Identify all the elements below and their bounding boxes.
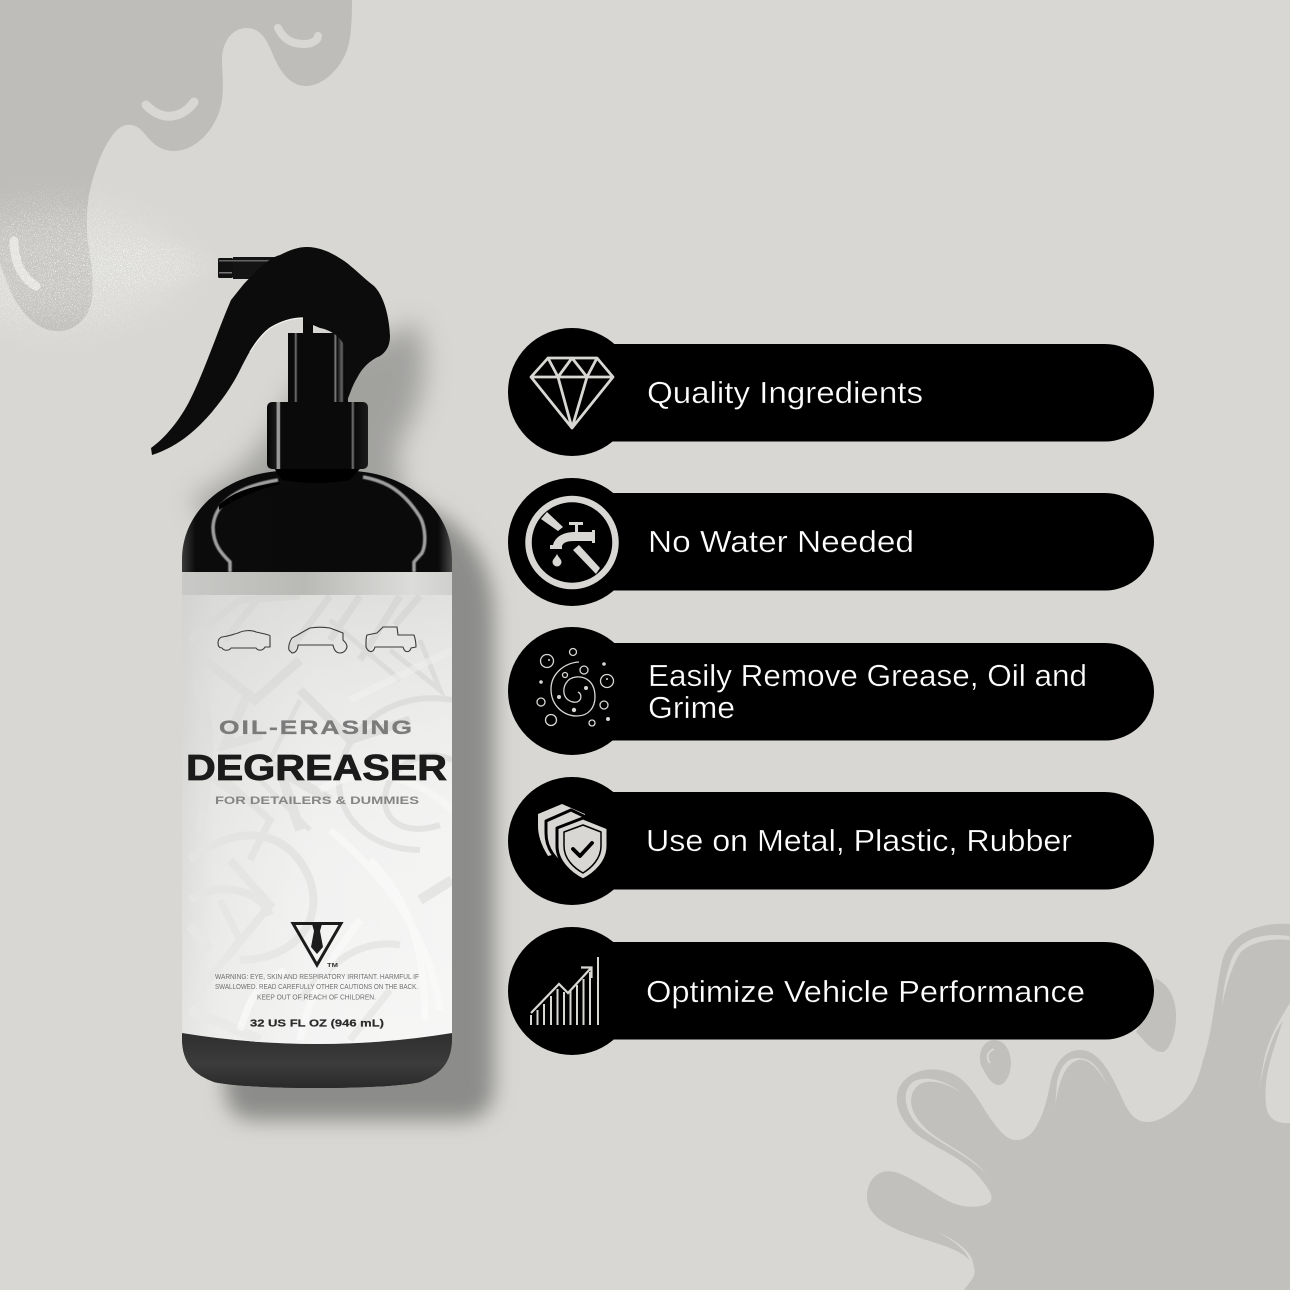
warning text [215,972,420,1002]
benefit 4: use on metal, plastic, rubber: Use on Metal, Plastic, Rubber [646,823,1072,858]
icon: layered shields [538,804,608,880]
spray mist [0,175,225,355]
label text: FOR DETAILERS & DUMMIES [215,795,419,807]
benefit 2: no water needed [508,478,1154,606]
top-left liquid drip [0,0,352,331]
warning text: KEEP OUT OF REACH OF CHILDREN. [257,992,376,1002]
bottom-right liquid splash [867,924,1290,1290]
benefit 1: quality ingredients: Quality Ingredients [647,375,923,410]
volume text: 32 US FL OZ (946 mL) [250,1018,384,1030]
pump neck [288,316,348,405]
bottle body [182,469,452,1088]
car outlines [218,627,416,653]
trigger underside highlight [250,318,303,352]
icon: diamond [531,358,613,428]
icon: crossed tap [528,499,616,586]
brand logo [293,924,341,969]
benefit 5: optimize vehicle performance: Optimize Vehicle Performance [646,974,1085,1009]
label text [186,717,447,807]
benefit 3: easily remove grease: Easily Remove Grease, Oil and [648,658,1087,693]
base [182,1028,452,1088]
brand logo: TM [327,963,338,969]
icon: swirl and bubbles [537,648,614,726]
benefit 4: use on metal, plastic, rubber [508,777,1154,905]
benefit 3: easily remove grease [508,627,1154,755]
cap [267,402,368,469]
trigger nozzle [218,257,283,279]
icon: rising chart [531,957,598,1025]
shoulder dark sweep [219,482,280,510]
benefit 3: easily remove grease: Grime [648,690,735,725]
benefit 5: optimize vehicle performance [508,927,1154,1055]
benefit 2: no water needed: No Water Needed [648,524,914,559]
label text: DEGREASER [186,747,447,788]
label pattern [250,595,452,1042]
label text: OIL-ERASING [219,717,414,739]
trigger head [151,247,390,455]
shoulder highlights [213,477,425,572]
label [182,572,452,1052]
benefit 1: quality ingredients [508,328,1154,456]
warning text: SWALLOWED. READ CAREFULLY OTHER CAUTIONS ON THE BACK. [215,982,418,991]
spray bottle [151,247,452,1088]
collar [270,462,366,483]
product shadow [190,320,494,1120]
warning text: WARNING: EYE, SKIN AND RESPIRATORY IRRITANT. HARMFUL IF [215,972,420,981]
